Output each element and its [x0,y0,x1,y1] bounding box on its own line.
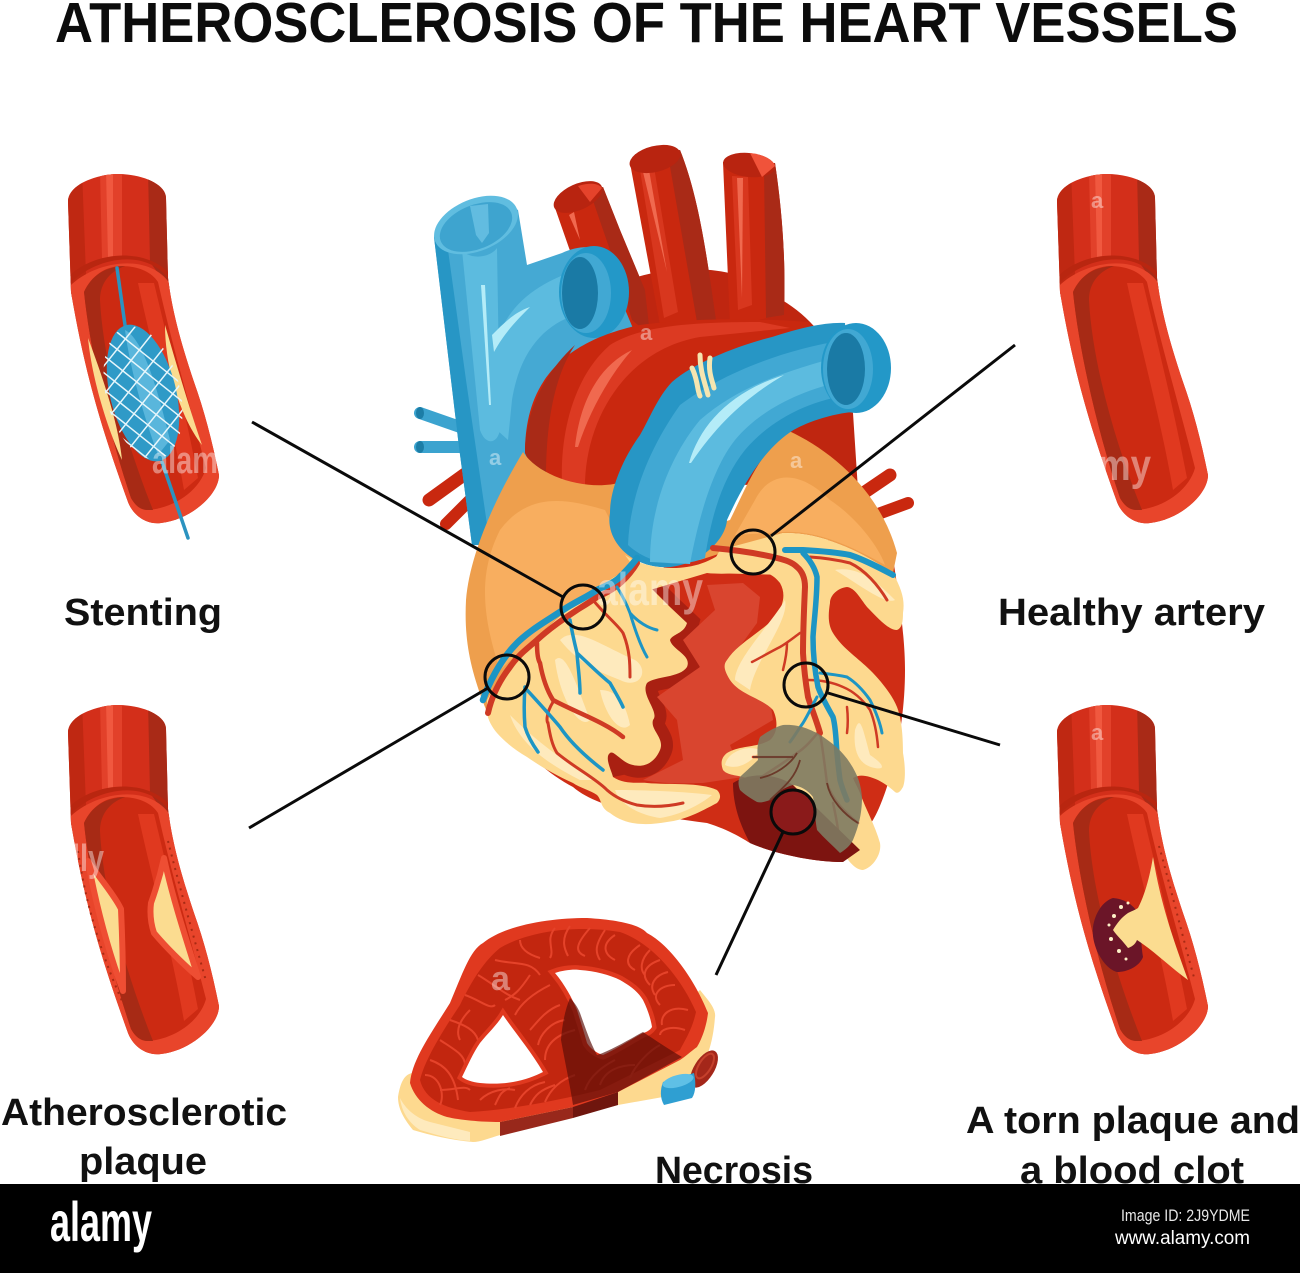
watermarks: a [1091,720,1104,745]
watermarks: a [489,445,502,470]
light muscle centre [643,583,773,783]
fat base [398,990,715,1142]
plaque crumbs [1108,902,1130,960]
coronary veins [483,550,893,800]
alamy logo: alamy [50,1190,152,1253]
footer bar [0,1184,1300,1273]
label: healthy artery: Healthy artery [998,592,1265,634]
label: atherosclerotic plaque [1,1092,287,1183]
website: www.alamy.com [1114,1228,1250,1249]
artery: healthy: my [1098,441,1151,490]
plaque left [88,861,123,991]
outer wall [410,918,708,1122]
fat connector [625,533,790,590]
aorta arch [525,319,815,487]
wall dots [78,841,206,1001]
label: torn plaque and blood clot: a blood clot [1020,1150,1244,1192]
section watermark: a [491,960,511,998]
torn plaque [1113,857,1188,980]
label: torn plaque and blood clot: A torn plaque and [966,1100,1300,1142]
dark muscle halo [608,587,688,777]
muscle inner [420,929,696,1112]
heart illustration [416,140,908,870]
section blue vessel [661,1071,695,1105]
bottom heart section [398,918,724,1142]
myocardium [487,540,905,862]
ligament [692,355,714,396]
section red vessel [684,1046,724,1092]
watermarks [489,188,1104,745]
artery: torn plaque and clot [1049,701,1219,1061]
pulmonary artery [609,323,891,567]
watermarks: a [790,448,803,473]
label: stenting: Stenting [64,592,222,634]
stent balloon [104,324,182,462]
coronary arteries [488,548,887,830]
image id: Image ID: 2J9YDME [1121,1206,1250,1225]
artery: healthy [1049,170,1219,530]
callout lines and circles [249,345,1015,975]
right ventricle rim and cavity [555,970,652,1055]
artery: atherosclerotic plaque [60,701,230,1061]
pale fat highlights [510,569,895,818]
watermarks: a [1091,188,1104,213]
watermarks: a [640,320,653,345]
label: atherosclerotic plaque: plaque [79,1141,207,1183]
watermark on heart: alamy [597,563,703,615]
superior vena cava [425,184,640,545]
wall side dark bands [500,1107,573,1136]
guide wire [117,268,188,538]
necrotic area [561,998,682,1105]
muscle fibre lines [425,926,688,1108]
plaque slivers [88,338,122,460]
aortic branches [549,140,858,490]
artery: atherosclerotic plaque: lly [72,838,104,880]
watermark: alam [152,440,218,482]
plaque right [150,858,198,977]
left ventricle rim and cavity [462,1015,543,1084]
small side vessels [416,407,908,524]
blood clot [1093,898,1143,972]
epicardial fat orange [466,431,897,712]
label: atherosclerotic plaque: Atherosclerotic [1,1092,287,1134]
artery: stenting [68,174,219,540]
necrotic zone [733,725,862,862]
label: torn plaque and blood clot [966,1100,1300,1192]
left fat patch [487,563,720,824]
label: necrosis: Necrosis [655,1150,813,1192]
right fat patch [707,533,905,870]
